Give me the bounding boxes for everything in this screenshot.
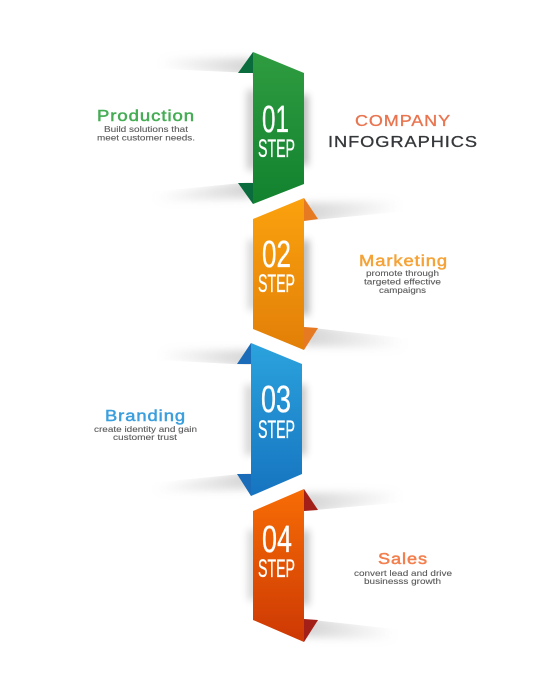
title: INFOGRAPHICS <box>328 134 478 151</box>
panel: step 2 marketing <box>248 198 448 350</box>
text: production description <box>97 125 195 142</box>
panel: step 3 branding <box>94 343 306 496</box>
title <box>328 113 478 151</box>
step 1 label: STEP <box>258 135 295 163</box>
text: sales description: businesss growth <box>364 577 442 586</box>
text: sales description <box>354 569 453 586</box>
text: marketing description: promote through <box>366 269 440 278</box>
heading: branding: Branding <box>105 408 186 425</box>
text: marketing description: campaigns <box>379 286 426 295</box>
step 4 number: 04 <box>262 519 292 561</box>
heading: marketing: Marketing <box>359 253 448 270</box>
panel: step 4 sales <box>248 489 453 642</box>
icon: step 1 ribbon <box>238 52 308 204</box>
heading: production: Production <box>97 108 195 125</box>
text: production description: meet customer needs. <box>97 134 195 142</box>
step 2 label: STEP <box>258 270 295 298</box>
text: sales description: convert lead and drive <box>354 569 453 578</box>
text: branding description: customer trust <box>113 433 178 442</box>
icon: step 3 ribbon <box>237 343 306 496</box>
heading: sales: Sales <box>378 551 428 568</box>
text: marketing description <box>364 269 442 295</box>
step 3 label: STEP <box>258 416 295 444</box>
step 1 number: 01 <box>262 99 289 141</box>
text: branding description: create identity and gain <box>94 425 198 434</box>
icon: step 4 ribbon <box>248 489 318 642</box>
text: marketing description: targeted effective <box>364 278 442 286</box>
text: branding description <box>94 425 198 442</box>
text: production description: Build solutions that <box>104 125 189 134</box>
panel: step 1 production <box>97 52 308 204</box>
icon: step 2 ribbon <box>248 198 318 350</box>
step 4 label: STEP <box>258 555 295 583</box>
step 2 number: 02 <box>262 234 291 276</box>
step 3 number: 03 <box>261 379 291 421</box>
title: COMPANY <box>355 113 451 130</box>
